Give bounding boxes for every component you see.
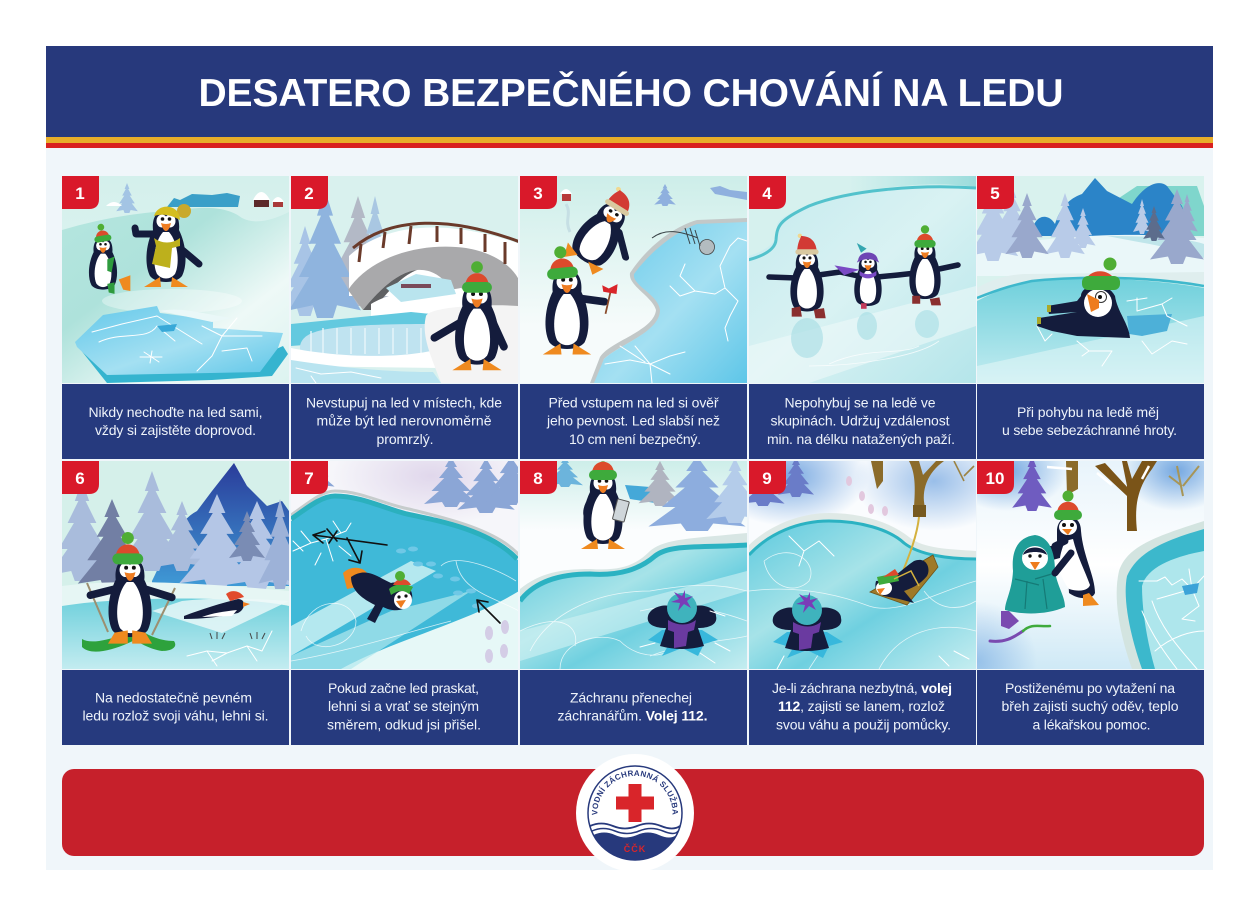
number badge 3: 3 bbox=[533, 184, 543, 203]
number badge 3 bbox=[520, 176, 557, 209]
number badge 8: 8 bbox=[533, 469, 543, 488]
penguin with axe bbox=[543, 245, 618, 354]
illustration 6: penguin on skis and lying penguin bbox=[62, 461, 289, 669]
caption 10 bbox=[977, 670, 1204, 745]
crawling penguin bbox=[343, 568, 413, 623]
stone and fishbone bbox=[652, 228, 714, 254]
lying penguin bbox=[184, 591, 250, 619]
number badge 8 bbox=[520, 461, 557, 494]
caption 10: a lékařskou pomoc. bbox=[1032, 716, 1150, 732]
caption 4 bbox=[749, 384, 976, 459]
panel 9 bbox=[709, 426, 1014, 745]
caption 3: Před vstupem na led si ověř bbox=[548, 394, 719, 410]
seated penguin bbox=[89, 222, 130, 294]
number badge 2: 2 bbox=[304, 184, 314, 203]
illustration 3: testing ice thickness bbox=[520, 176, 747, 383]
illustration 7: penguin crawling back bbox=[291, 461, 518, 669]
penguin jumping bbox=[560, 180, 655, 285]
illustration 1: penguins and pond bbox=[62, 176, 289, 383]
arrows bbox=[313, 529, 500, 623]
swimmer in hole bbox=[773, 592, 843, 658]
number badge 9 bbox=[749, 461, 786, 494]
caption 7: směrem, odkud jsi přišel. bbox=[327, 716, 481, 732]
wet hat and scarf bbox=[990, 611, 1050, 641]
number badge 1: 1 bbox=[75, 184, 85, 203]
number badge 10 bbox=[977, 461, 1014, 494]
caption 2: Nevstupuj na led v místech, kde bbox=[306, 394, 502, 410]
panel 4 bbox=[748, 176, 976, 459]
panel 10 bbox=[917, 431, 1232, 745]
caption 9: Je-li záchrana nezbytná, volej bbox=[772, 680, 952, 696]
illustration 10: penguin wrapped in blanket bbox=[977, 461, 1204, 669]
number badge 4: 4 bbox=[762, 184, 772, 203]
penguin bbox=[1037, 258, 1130, 338]
caption 9 bbox=[749, 670, 976, 745]
number badge 5: 5 bbox=[990, 184, 1000, 203]
panel 7 bbox=[291, 426, 536, 745]
penguin red hat bbox=[790, 234, 826, 318]
caption 1: Nikdy nechoďte na led sami, bbox=[88, 404, 262, 420]
caption 5 bbox=[977, 384, 1204, 459]
linked arms bbox=[769, 265, 958, 278]
caption 6: ledu rozlož svoji váhu, lehni si. bbox=[82, 708, 268, 724]
red footer bar bbox=[62, 769, 1204, 856]
caption 3: 10 cm není bezpečný. bbox=[569, 431, 701, 447]
number badge 5 bbox=[977, 176, 1014, 209]
caption 7: lehni si a vrať se stejným bbox=[328, 698, 479, 714]
footprints bbox=[396, 546, 482, 608]
penguin bbox=[434, 261, 504, 370]
penguin with phone bbox=[581, 450, 629, 549]
illustration 4: three skating penguins bbox=[749, 176, 976, 383]
caption 4: Nepohybuj se na ledě ve bbox=[784, 394, 936, 410]
number badge 6 bbox=[62, 461, 99, 494]
number badge 2 bbox=[291, 176, 328, 209]
panel 1 bbox=[62, 176, 289, 459]
penguin purple hat bbox=[834, 243, 882, 309]
caption 9: 112, zajisti se lanem, rozlož bbox=[778, 698, 945, 714]
caption 7: Pokud začne led praskat, bbox=[328, 680, 479, 696]
penguin with yellow scarf bbox=[135, 204, 199, 287]
ice pond bbox=[1117, 521, 1204, 669]
panel 5 bbox=[968, 176, 1204, 459]
logo: Vodní záchranná služba ČČK: ČČK bbox=[624, 843, 646, 854]
standing penguin bbox=[1047, 490, 1099, 606]
caption 8 bbox=[520, 670, 747, 745]
swimmer in hole bbox=[648, 590, 718, 656]
reflections bbox=[791, 310, 939, 358]
panel 8 bbox=[520, 450, 764, 745]
number badge 10: 10 bbox=[986, 469, 1004, 488]
pond bbox=[977, 272, 1204, 296]
number badge 4 bbox=[749, 176, 786, 209]
caption 5: Při pohybu na ledě měj bbox=[1017, 404, 1159, 420]
caption 6 bbox=[62, 670, 289, 745]
illustration 9: rescue with sled and rope bbox=[749, 461, 976, 669]
panel 3 bbox=[520, 176, 747, 459]
caption 1: vždy si zajistěte doprovod. bbox=[95, 422, 256, 438]
sled with penguin bbox=[870, 555, 938, 605]
skier penguin bbox=[82, 532, 175, 652]
number badge 9: 9 bbox=[762, 469, 772, 488]
ice sheet bbox=[749, 513, 976, 561]
ice sheet bbox=[520, 533, 747, 601]
caption 4: skupinách. Udržuj vzdálenost bbox=[770, 413, 950, 429]
water with cracks bbox=[590, 218, 747, 383]
logo: Vodní záchranná služba ČČK bbox=[576, 754, 694, 870]
illustration 5: penguin in ice hole bbox=[977, 176, 1204, 383]
pond bbox=[75, 306, 288, 383]
trees bbox=[1047, 461, 1199, 531]
number badge 6: 6 bbox=[75, 469, 85, 488]
caption 10: břeh zajisti suchý oděv, teplo bbox=[1002, 698, 1179, 714]
ice sheet bbox=[291, 497, 519, 669]
caption 10: Postiženému po vytažení na bbox=[1005, 680, 1175, 696]
caption 8: záchranářům. Volej 112. bbox=[558, 708, 708, 724]
bridge bbox=[348, 223, 520, 316]
logo: Vodní záchranná služba ČČK: VODNÍ ZÁCHRANNÁ SLUŽBA bbox=[592, 770, 678, 815]
background panel bbox=[46, 148, 1213, 870]
caption 7 bbox=[291, 670, 518, 745]
caption 8: Záchranu přenechej bbox=[570, 690, 692, 706]
caption 2: promrzlý. bbox=[376, 431, 434, 447]
number badge 7 bbox=[291, 461, 328, 494]
penguin green hat bbox=[909, 225, 941, 305]
illustration 8: penguin calling for rescue bbox=[520, 461, 747, 669]
caption 5: u sebe sebezáchranné hroty. bbox=[1002, 422, 1177, 438]
title: DESATERO BEZPEČNÉHO CHOVÁNÍ NA LEDU bbox=[198, 70, 1064, 115]
header banner bbox=[46, 46, 1213, 148]
caption 9: svou váhu a použij pomůcky. bbox=[776, 716, 951, 732]
caption 6: Na nedostatečně pevném bbox=[95, 690, 252, 706]
number badge 7: 7 bbox=[304, 469, 314, 488]
panel 2 bbox=[280, 176, 520, 459]
caption 1 bbox=[62, 384, 289, 459]
caption 2: může být led nerovnoměrně bbox=[316, 413, 492, 429]
caption 2 bbox=[291, 384, 518, 459]
caption 3 bbox=[520, 384, 747, 459]
caption 3: jeho pevnost. Led slabší než bbox=[546, 413, 720, 429]
blanket penguin bbox=[1005, 535, 1071, 613]
illustration 2: penguin by bridge bbox=[291, 176, 518, 383]
trees and rope bbox=[871, 461, 974, 571]
number badge 1 bbox=[62, 176, 99, 209]
caption 4: min. na délku natažených paží. bbox=[767, 431, 955, 447]
panel 6 bbox=[50, 461, 302, 745]
